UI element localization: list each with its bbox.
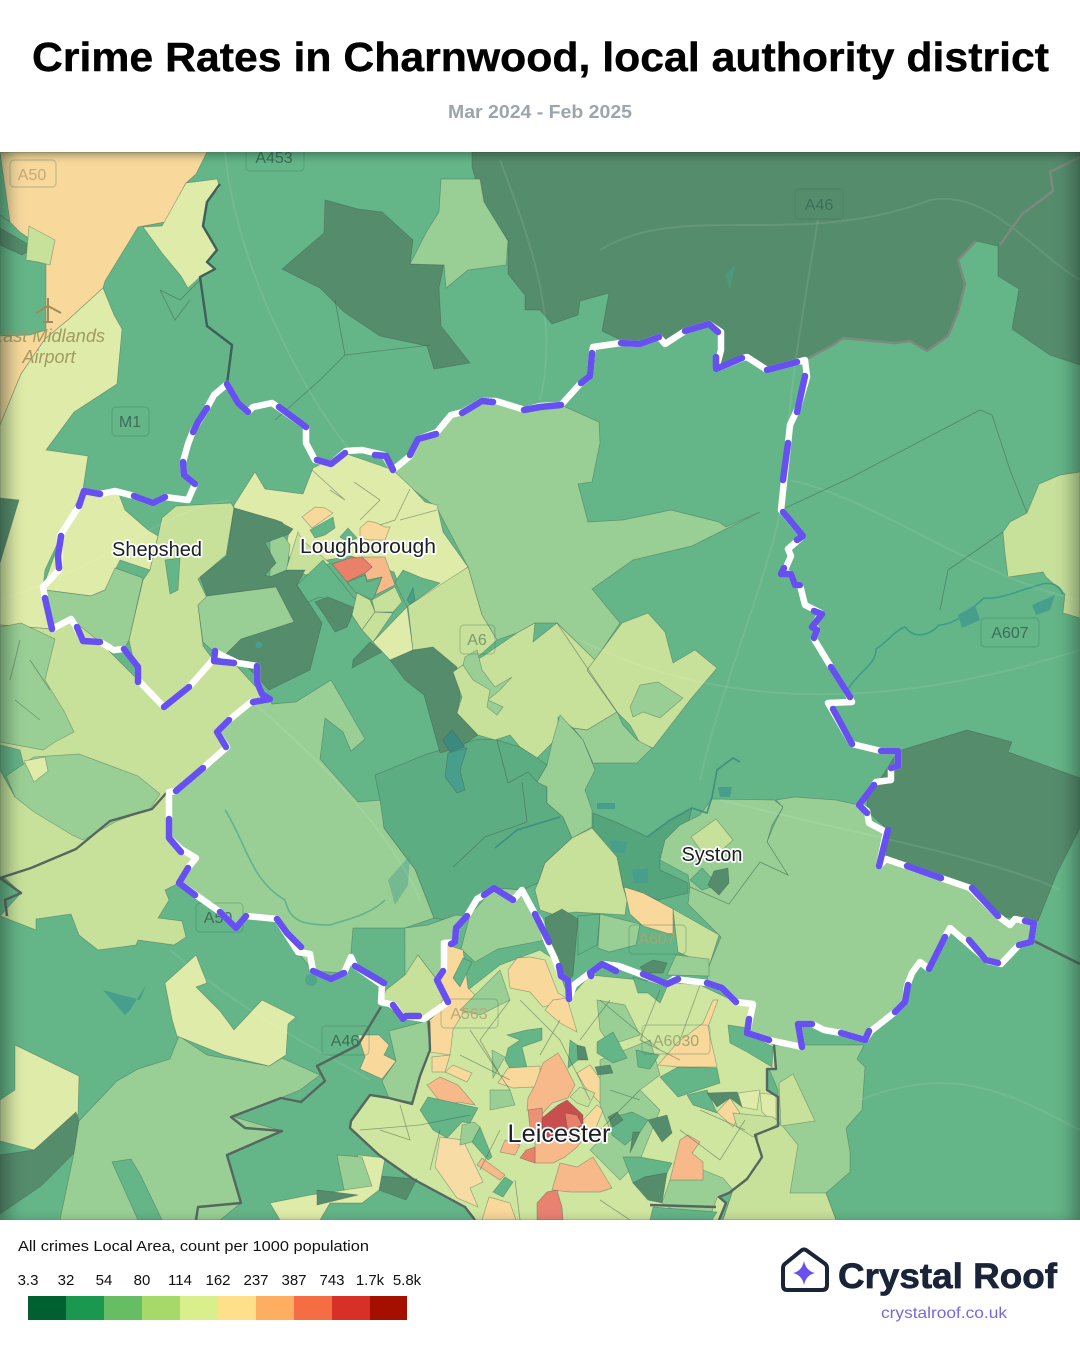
- label: East Midlands Airport: Airport: [21, 347, 77, 367]
- fine ward outlines: [10, 280, 1027, 1220]
- place label: Loughborough: Loughborough: [300, 536, 436, 558]
- district boundary lines: [0, 157, 1080, 1220]
- place label: Syston: Syston: [682, 844, 742, 866]
- legend values: 3.3: [18, 1272, 38, 1289]
- road label: M1: M1: [119, 414, 141, 431]
- road label: A453: A453: [255, 150, 293, 167]
- road label: A6030: [642, 1025, 710, 1054]
- icon: airport plane: [36, 298, 61, 322]
- road label: A607 Leicester: A607: [638, 931, 676, 948]
- road label: A563: A563: [450, 1006, 488, 1023]
- road label: A607 east: A607: [991, 625, 1029, 642]
- road label: A46 south: A46: [331, 1033, 359, 1050]
- place label: Leicester: Leicester: [508, 1120, 610, 1148]
- road label: A453: [246, 152, 304, 172]
- road label: A6030: A6030: [653, 1033, 699, 1050]
- water features: [103, 265, 1063, 1015]
- road label: A50 south: [196, 903, 243, 932]
- legend: [18, 1238, 422, 1320]
- choropleth areas: east and Syston: [461, 472, 1080, 1220]
- place label: Shepshed: Shepshed: [112, 539, 202, 561]
- road label: A50: A50: [18, 167, 46, 184]
- choropleth areas: north and west: [0, 152, 1080, 1220]
- legend values: 162: [205, 1272, 231, 1289]
- legend values: 387: [281, 1272, 307, 1289]
- choropleth areas: Leicester city wards: [270, 915, 780, 1220]
- road label: A46 south: [322, 1026, 369, 1055]
- legend values: 5.8k: [393, 1272, 422, 1289]
- logo: Crystal Roof: [783, 1250, 1057, 1322]
- road label: M1: [112, 407, 149, 436]
- road label: A50: [10, 160, 56, 187]
- title: Crime Rates in Charnwood, local authority district: [32, 34, 1049, 80]
- icon: house with star: [783, 1250, 827, 1290]
- logo url: crystalroof.co.uk: [881, 1305, 1008, 1322]
- legend values: 237: [243, 1272, 269, 1289]
- legend values: [18, 1272, 422, 1289]
- road label: A563: [441, 999, 498, 1028]
- legend title: All crimes Local Area, count per 1000 population: [18, 1238, 369, 1255]
- choropleth areas: centre and Loughborough: [198, 401, 760, 838]
- legend values: 1.7k: [356, 1272, 385, 1289]
- label: East Midlands Airport: [0, 326, 105, 367]
- legend colour scale: [28, 1296, 407, 1320]
- road label: A6: [460, 625, 495, 654]
- subtitle: date range: Mar 2024 - Feb 2025: [448, 102, 632, 122]
- road label: A46 north: A46: [805, 197, 833, 214]
- legend values: 114: [168, 1272, 192, 1289]
- district outline: white base line: [43, 324, 1034, 1047]
- legend values: 32: [58, 1272, 74, 1289]
- district outline: purple dashes: [45, 324, 1034, 1047]
- road label: A46 north: [795, 189, 843, 219]
- road label: A607 Leicester: [629, 925, 686, 954]
- road label: A50 south: A50: [204, 910, 232, 927]
- road label: A6: A6: [467, 632, 487, 649]
- road label: A607 east: [981, 618, 1039, 647]
- roads: [148, 152, 1080, 1130]
- legend values: 80: [134, 1272, 150, 1289]
- logo wordmark: Crystal Roof: [838, 1257, 1057, 1296]
- legend values: 54: [96, 1272, 112, 1289]
- choropleth map: [0, 145, 1080, 1220]
- legend values: 743: [319, 1272, 345, 1289]
